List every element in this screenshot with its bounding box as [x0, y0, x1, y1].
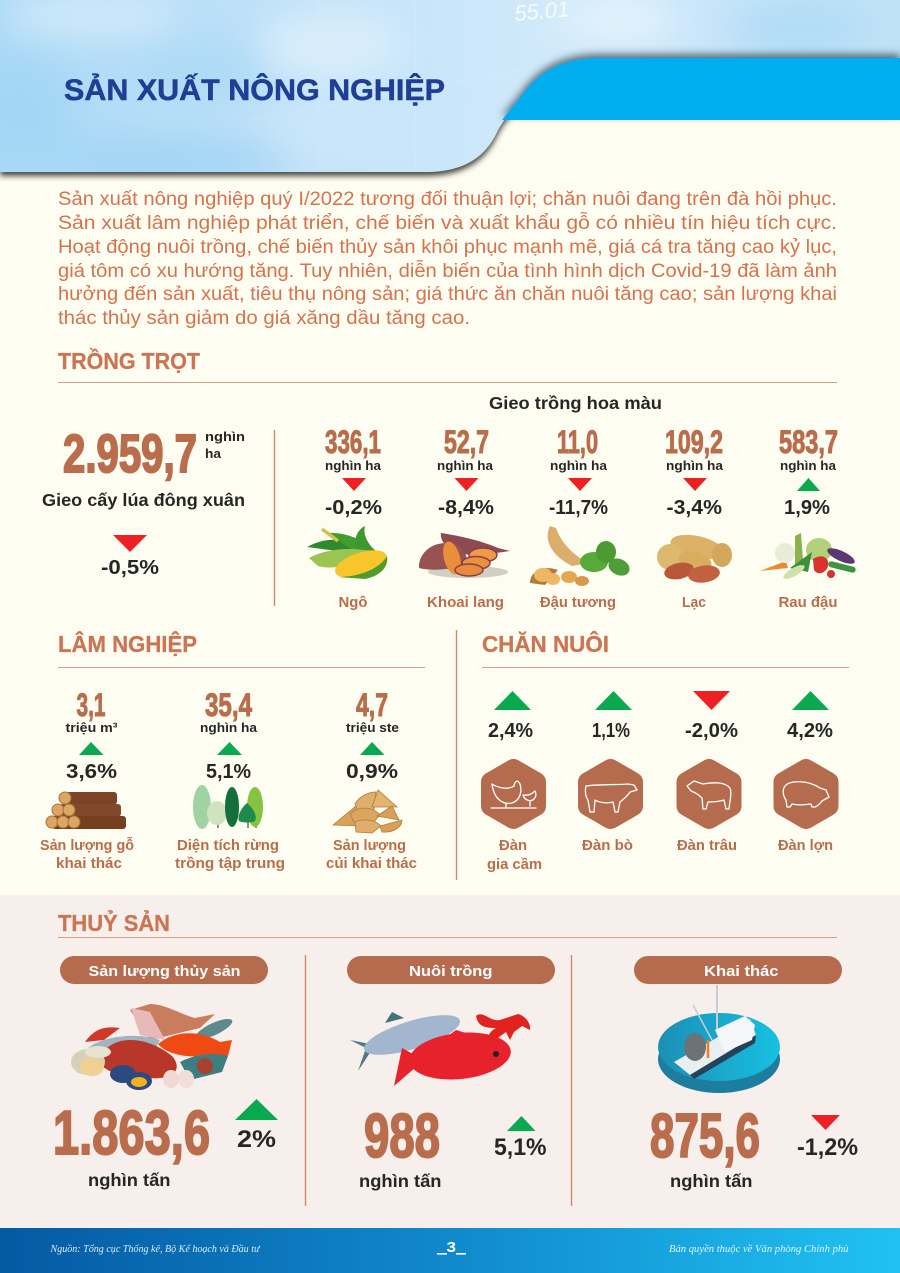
icon: trees: [193, 785, 263, 829]
stat: diện tích rừng: [175, 687, 285, 872]
stat: diện tích rừng: 5,1%: [206, 761, 251, 783]
crop: lạc: nghìn ha: [666, 458, 724, 473]
icon: sweet potato: [419, 533, 510, 578]
intro paragraph: hưởng đến sản xuất, tiêu thụ nông sản; giá thức ăn chăn nuôi tăng cao; sản lượng khai: [58, 284, 837, 305]
panel: khai thác: nghìn tấn: [670, 1171, 752, 1191]
livestock: lợn: Đàn lợn: [778, 837, 833, 854]
crop: ngô: 336,1: [325, 424, 381, 460]
stat: sản lượng gỗ: khai thác: [56, 855, 122, 872]
section: chăn nuôi: [482, 630, 849, 873]
footer: 3: [446, 1239, 456, 1256]
crop: rau đậu: nghìn ha: [780, 458, 837, 473]
stat: diện tích rừng: nghìn ha: [200, 720, 258, 735]
crop: đậu tương: Đậu tương: [540, 594, 616, 611]
crop: rau đậu: 583,7: [779, 424, 838, 460]
stat: củi khai thác: Sản lượng: [333, 837, 406, 854]
icon: peanut: [657, 531, 732, 585]
footer: [0, 1228, 900, 1273]
intro paragraph: [58, 189, 837, 329]
icon: soybean: [530, 526, 632, 586]
icon: fishing boat: [658, 985, 780, 1093]
panel: khai thác: Khai thác: [704, 963, 778, 980]
crop: đậu tương: nghìn ha: [550, 458, 608, 473]
stat: sản lượng gỗ: Sản lượng gỗ: [40, 837, 134, 854]
icon: chickens: [491, 781, 536, 808]
intro paragraph: Sản xuất lâm nghiệp phát triển, chế biến và xuất khẩu gỗ có nhiều tín hiệu tích cực.: [58, 212, 837, 234]
heading: chăn nuôi: CHĂN NUÔI: [482, 630, 609, 657]
crop: đậu tương: [530, 424, 632, 611]
panel: sản lượng thủy sản: Sản lượng thủy sản: [88, 963, 240, 980]
stat: củi khai thác: 0,9%: [346, 761, 398, 783]
heading: trồng trọt: TRỒNG TRỌT: [58, 347, 200, 374]
crop: lạc: 109,2: [665, 424, 723, 460]
heading: lâm nghiệp: LÂM NGHIỆP: [58, 630, 197, 657]
crop: ngô: -0,2%: [325, 497, 382, 519]
section: thuỷ sản: [0, 895, 900, 1228]
panel: nuôi trồng: [347, 956, 555, 1191]
livestock: trâu: Đàn trâu: [677, 837, 737, 854]
panel: khai thác: 875,6: [650, 1102, 760, 1171]
title: SẢN XUẤT NÔNG NGHIỆP: [64, 73, 445, 107]
stat: sản lượng gỗ: 3,6%: [66, 761, 117, 783]
section: trồng trọt: [42, 347, 857, 611]
livestock: bò: [582, 691, 637, 854]
stat: sản lượng gỗ: triệu m³: [66, 720, 118, 735]
icon: vegetables: [760, 533, 857, 581]
heading: thuỷ sản: THUỶ SẢN: [58, 908, 170, 936]
intro paragraph: Hoạt động nuôi trồng, chế biến thủy sản khôi phục mạnh mẽ, giá cá tra tăng cao kỷ lục,: [58, 237, 837, 258]
section: lâm nghiệp: [40, 630, 425, 872]
panel: sản lượng thủy sản: 2%: [237, 1126, 276, 1153]
stat: diện tích rừng: trồng tập trung: [175, 855, 285, 872]
crop: đậu tương: -11,7%: [549, 497, 608, 519]
footer: Bản quyền thuộc về Văn phòng Chính phủ: [669, 1243, 849, 1255]
stat: củi khai thác: củi khai thác: [326, 855, 417, 872]
icon: buffalo: [687, 781, 731, 809]
icon: seafood: [71, 1004, 235, 1090]
icon: cow: [585, 784, 637, 812]
crop: khoai lang: [419, 424, 510, 611]
panel: nuôi trồng: Nuôi trồng: [409, 963, 492, 980]
icon: corn: [307, 526, 390, 583]
panel: nuôi trồng: 5,1%: [494, 1134, 546, 1161]
rice stat: nghìn: [205, 429, 245, 444]
rice stat: -0,5%: [101, 557, 159, 579]
crop: rau đậu: Rau đậu: [778, 594, 838, 611]
crop: khoai lang: nghìn ha: [437, 458, 494, 473]
icon: pig: [783, 782, 829, 807]
stat: sản lượng gỗ: [40, 687, 134, 872]
intro paragraph: thác thủy sản giảm do giá xăng dầu tăng cao.: [58, 308, 470, 329]
crop: ngô: [307, 424, 390, 611]
blue header band: [502, 58, 900, 120]
stat: diện tích rừng: Diện tích rừng: [177, 837, 279, 854]
rice stat: 2.959,7: [63, 424, 197, 484]
crop: khoai lang: Khoai lang: [427, 594, 504, 611]
panel: khai thác: [634, 956, 858, 1191]
intro paragraph: giá tôm có xu hướng tăng. Tuy nhiên, diễn biến của tình hình dịch Covid-19 đã làm ảnh: [58, 260, 837, 282]
livestock: trâu: [677, 691, 738, 854]
subheading: gieo trồng hoa màu: Gieo trồng hoa màu: [489, 393, 662, 413]
stat: sản lượng gỗ: 3,1: [76, 687, 106, 723]
crop: ngô: Ngô: [338, 594, 368, 611]
rice stat: [42, 424, 245, 579]
crop: rau đậu: [760, 424, 857, 611]
livestock: gia cầm: Đàn: [499, 837, 527, 854]
livestock: gia cầm: [487, 691, 542, 873]
footer: Nguồn: Tổng cục Thống kê, Bộ Kế hoạch và Đầu tư: [50, 1243, 260, 1255]
rice stat: ha: [205, 446, 222, 461]
icon: fish and lobster: [350, 1007, 530, 1086]
rice stat: Gieo cấy lúa đông xuân: [42, 490, 245, 510]
crop: ngô: nghìn ha: [325, 458, 382, 473]
crop: rau đậu: 1,9%: [784, 497, 830, 519]
panel: nuôi trồng: nghìn tấn: [359, 1171, 442, 1191]
icon: logs: [46, 792, 126, 829]
livestock: lợn: 4,2%: [787, 720, 833, 742]
panel: nuôi trồng: 988: [364, 1102, 440, 1171]
livestock: bò: Đàn bò: [582, 837, 633, 854]
panel: sản lượng thủy sản: nghìn tấn: [88, 1170, 170, 1190]
icon: firewood: [333, 790, 402, 833]
livestock: gia cầm: gia cầm: [487, 856, 542, 873]
stat: củi khai thác: 4,7: [356, 687, 388, 723]
crop: lạc: -3,4%: [666, 497, 722, 519]
livestock: gia cầm: 2,4%: [488, 720, 533, 742]
panel: khai thác: -1,2%: [797, 1134, 858, 1161]
crop: đậu tương: 11,0: [557, 424, 598, 460]
livestock: bò: 1,1%: [592, 720, 630, 742]
stat: củi khai thác: [326, 687, 417, 872]
crop: lạc: Lạc: [682, 594, 706, 611]
crop: lạc: [657, 424, 732, 611]
header banner: [0, 0, 900, 178]
livestock: trâu: -2,0%: [685, 720, 738, 742]
stat: diện tích rừng: 35,4: [205, 687, 252, 723]
crop: khoai lang: -8,4%: [438, 497, 494, 519]
crop: khoai lang: 52,7: [444, 424, 489, 460]
livestock: lợn: [778, 691, 833, 854]
intro paragraph: Sản xuất nông nghiệp quý I/2022 tương đối thuận lợi; chăn nuôi đang trên đà hồi phục.: [58, 189, 837, 210]
panel: sản lượng thủy sản: [53, 956, 278, 1190]
stat: củi khai thác: triệu ste: [346, 720, 399, 735]
panel: sản lượng thủy sản: 1.863,6: [53, 1099, 210, 1168]
divider between sections: [456, 630, 458, 880]
